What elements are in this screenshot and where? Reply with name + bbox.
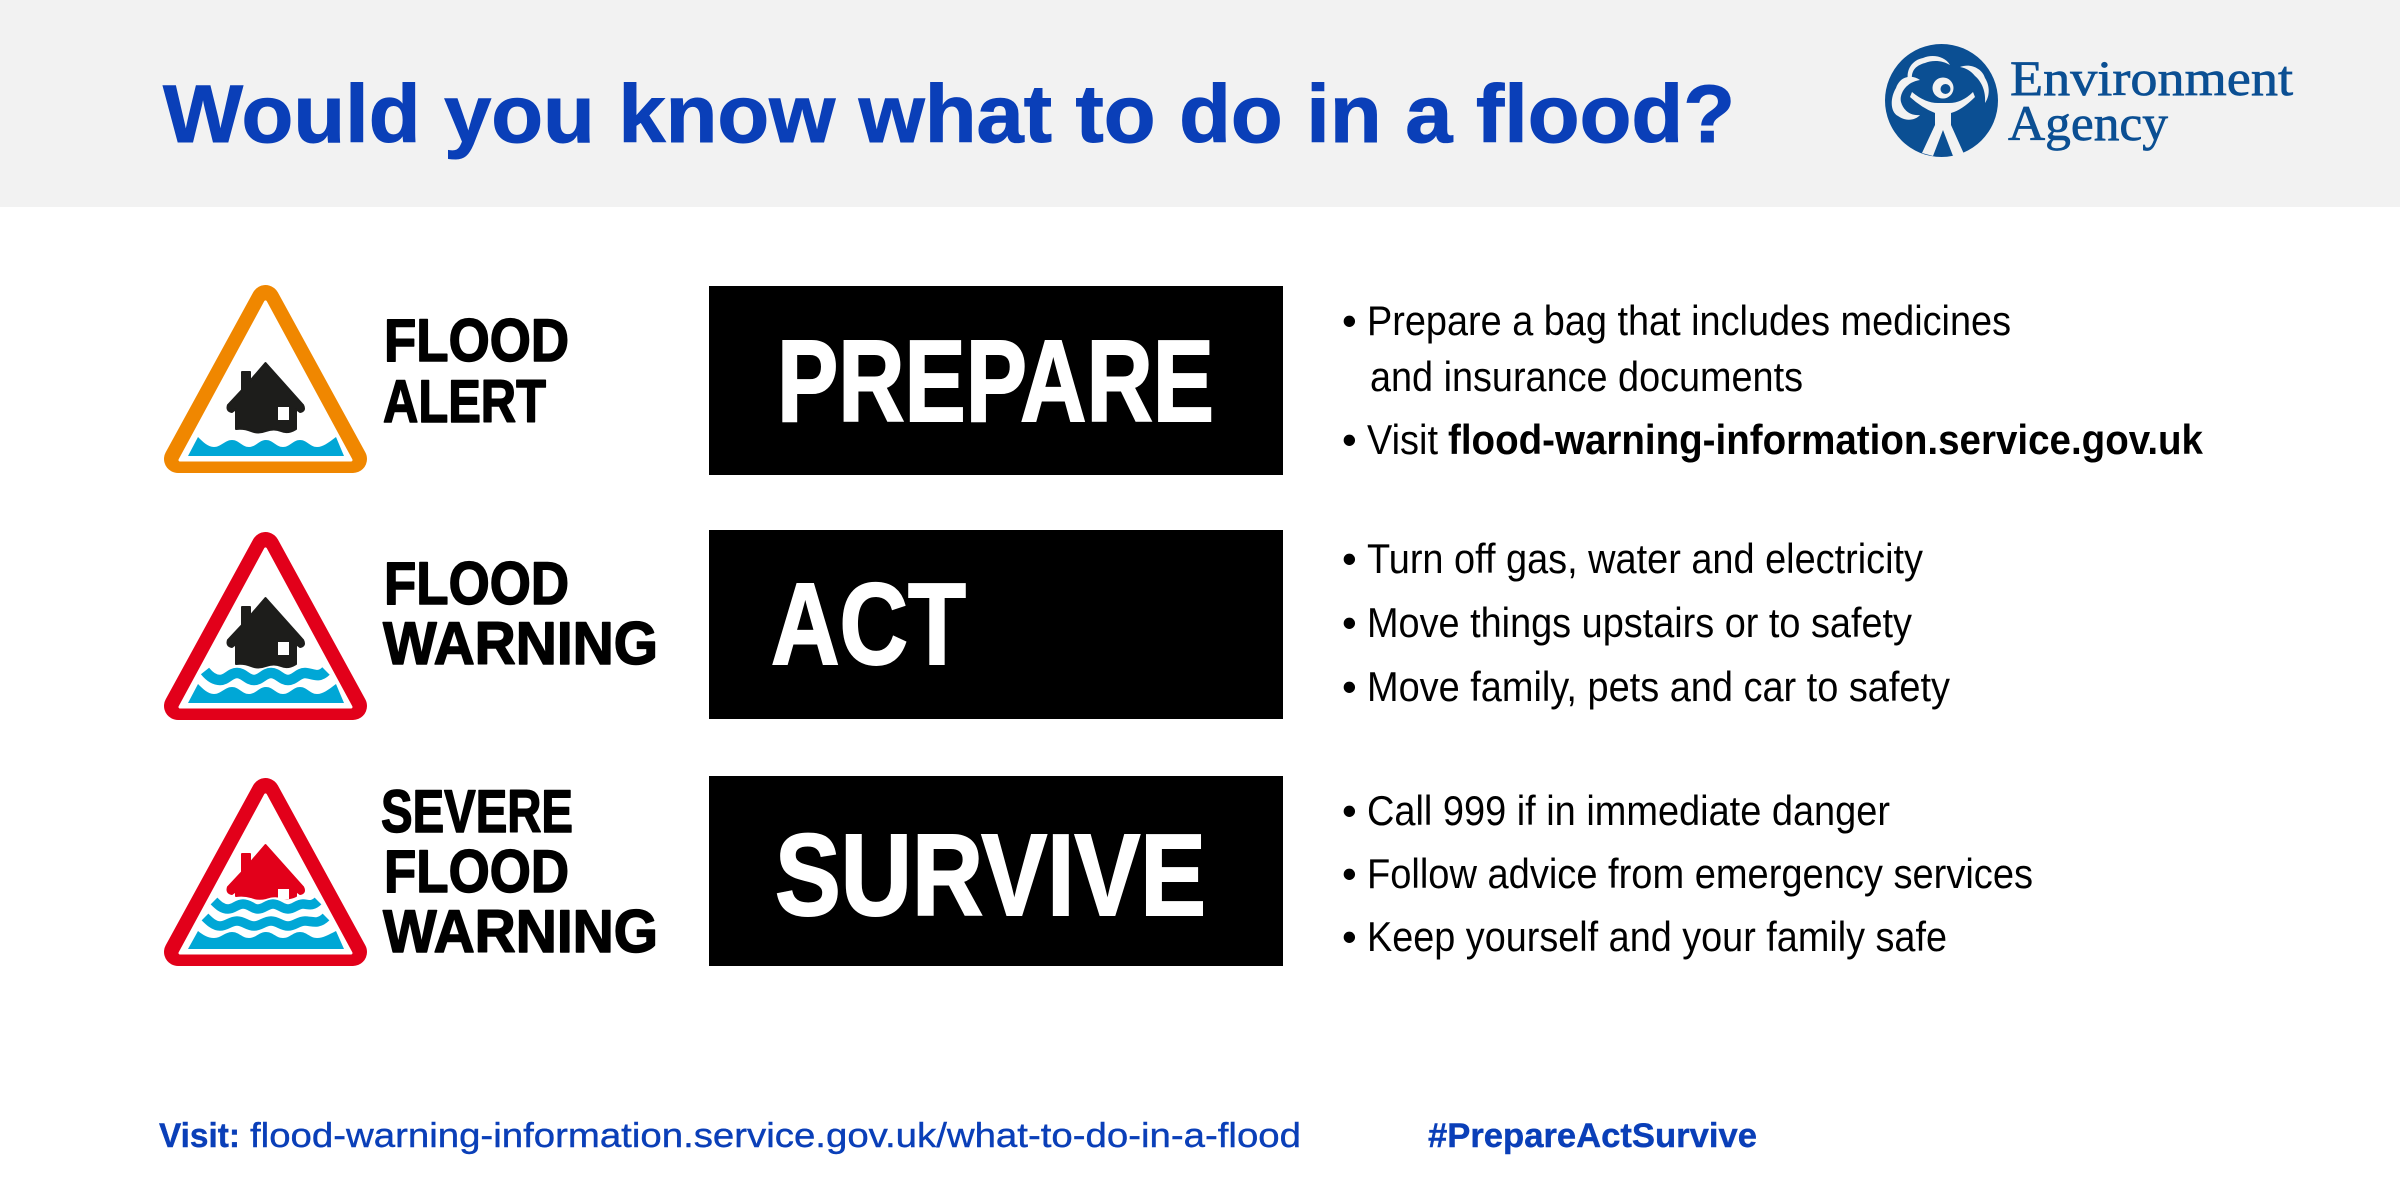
- icon: flood alert triangle: [178, 299, 353, 460]
- footer: visit link: Visit:: [159, 1117, 240, 1155]
- label: severe flood warning: SEVERE: [381, 778, 573, 845]
- label: flood warning: FLOOD: [384, 550, 569, 617]
- text: act actions: •: [1342, 535, 1357, 582]
- text: act actions: •: [1342, 599, 1357, 646]
- label: flood warning: WARNING: [383, 610, 658, 677]
- label: severe flood warning: WARNING: [383, 898, 658, 965]
- label: severe flood warning: FLOOD: [384, 838, 569, 905]
- panel: act box: [709, 530, 1283, 719]
- text: survive actions: Follow advice from emergency services: [1367, 850, 2033, 897]
- text: survive actions: [1342, 787, 2033, 960]
- label: flood warning: [383, 550, 658, 677]
- icon: flood warning triangle: [178, 546, 353, 707]
- panel: prepare box: PREPARE: [777, 316, 1214, 446]
- icon: severe flood warning triangle: [178, 792, 353, 953]
- text: act actions: Move family, pets and car to safety: [1367, 663, 1950, 710]
- text: survive actions: Keep yourself and your family safe: [1367, 913, 1947, 960]
- logo: Environment Agency: Environment: [2010, 50, 2293, 106]
- text: survive actions: •: [1342, 787, 1357, 834]
- logo: Environment Agency: [1885, 44, 2293, 157]
- text: act actions: •: [1342, 663, 1357, 710]
- label: flood alert: ALERT: [383, 368, 546, 435]
- panel: survive box: [709, 776, 1283, 966]
- panel: act box: ACT: [771, 559, 966, 689]
- panel: survive box: SURVIVE: [775, 810, 1206, 940]
- label: flood alert: FLOOD: [384, 307, 569, 374]
- text: act actions: [1342, 535, 1950, 710]
- title: Would you know what to do in a flood?: [163, 69, 1735, 160]
- text: prepare actions: flood-warning-information.service.gov.uk: [1448, 416, 2204, 463]
- header band: [0, 0, 2400, 207]
- text: act actions: Turn off gas, water and electricity: [1367, 535, 1923, 582]
- logo: Environment Agency: Agency: [2008, 95, 2168, 151]
- text: prepare actions: [1342, 297, 2204, 463]
- text: prepare actions: Prepare a bag that includes medicines: [1367, 297, 2011, 344]
- text: survive actions: Call 999 if in immediate danger: [1367, 787, 1890, 834]
- label: severe flood warning: [381, 778, 658, 965]
- text: survive actions: •: [1342, 913, 1357, 960]
- footer: hashtag: #PrepareActSurvive: [1428, 1117, 1757, 1155]
- label: flood alert: [383, 307, 569, 435]
- text: prepare actions: and insurance documents: [1370, 353, 1803, 400]
- text: act actions: Move things upstairs or to safety: [1367, 599, 1912, 646]
- text: prepare actions: •: [1342, 297, 1357, 344]
- text: prepare actions: •: [1342, 416, 1357, 463]
- footer: visit link: flood-warning-information.service.gov.uk/what-to-do-in-a-flood: [250, 1117, 1301, 1155]
- text: prepare actions: Visit: [1367, 416, 1438, 463]
- panel: prepare box: [709, 286, 1283, 475]
- text: survive actions: •: [1342, 850, 1357, 897]
